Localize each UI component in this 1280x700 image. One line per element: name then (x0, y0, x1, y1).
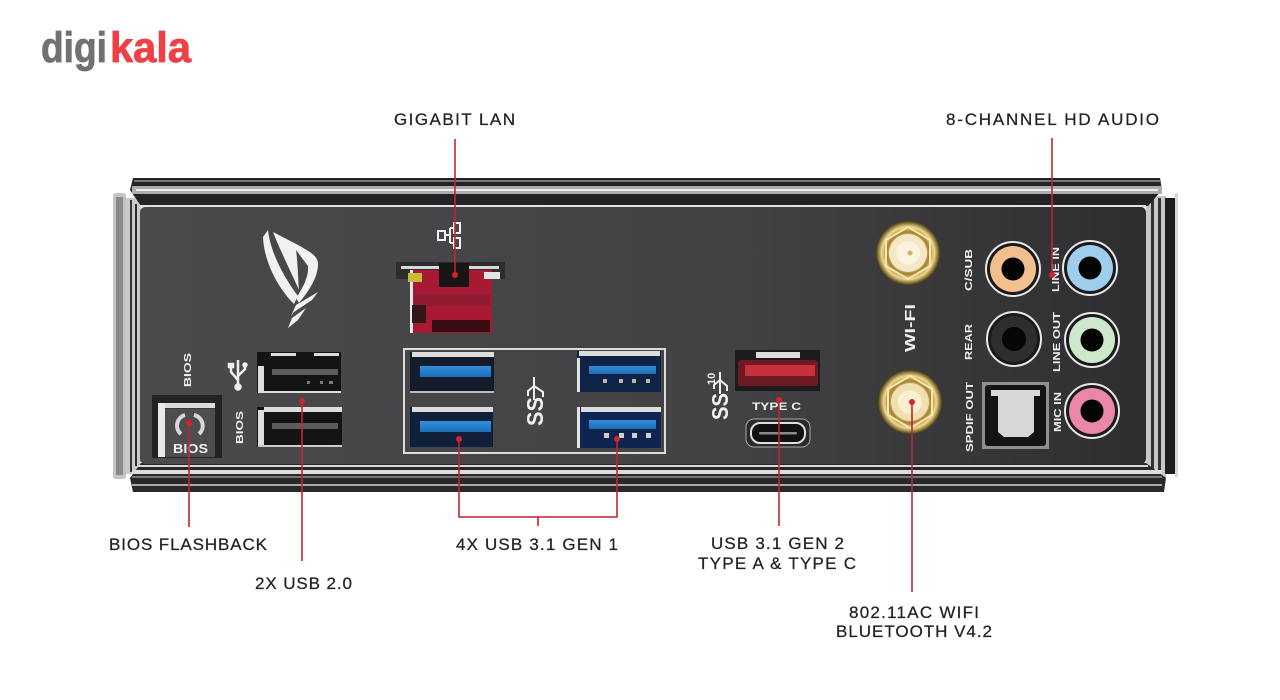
bottom rail (130, 463, 1166, 492)
Wi-Fi antenna connector top (876, 221, 940, 285)
icon: network (438, 223, 460, 248)
SS10 USB logo: 10 (706, 373, 718, 385)
silk labels: audio: MIC IN (1053, 392, 1064, 432)
silk label: TYPE C: TYPE C (752, 401, 801, 413)
white outline (404, 349, 665, 453)
jack: blue LINE IN (1063, 241, 1117, 295)
dark face plate (140, 207, 1146, 464)
silk label: BIOS beside button: BIOS (235, 411, 246, 444)
bottom-right blue port (577, 407, 661, 448)
logo: digikala: kala (110, 24, 192, 72)
top-right blue port (577, 351, 661, 392)
SPDIF optical port (982, 382, 1049, 449)
top-left blue port (410, 352, 494, 393)
label: USB 3.1 Gen 2 Type A and Type C (698, 534, 856, 573)
USB 2.0 ports (257, 352, 342, 447)
label: 802.11ac WiFi Bluetooth V4.2: BLUETOOTH V4.2 (836, 622, 992, 641)
BIOS flashback button (152, 395, 222, 458)
silk labels: audio: C/SUB (964, 249, 975, 291)
USB 3.1 Gen 2 Type-A port (735, 350, 820, 391)
SS10 USB logo (706, 372, 733, 420)
jack: black REAR (987, 312, 1041, 366)
ROG logo (263, 230, 318, 328)
silk label: WI-FI: WI-FI (902, 304, 919, 352)
label: BIOS flashback: BIOS FLASHBACK (109, 535, 268, 554)
silk labels: audio: LINE IN (1051, 247, 1062, 292)
silk labels: audio: SPDIF OUT (965, 382, 976, 452)
silk labels: audio: LINE OUT (1052, 312, 1063, 372)
left flange (113, 193, 141, 479)
right flange (1146, 193, 1178, 478)
BIOS flashback button: BIOS (173, 441, 208, 456)
leader line: 8-channel HD audio (1049, 138, 1055, 278)
label: 4X USB 3.1 Gen 1: 4X USB 3.1 GEN 1 (456, 535, 618, 554)
logo: digikala: digi (41, 24, 107, 72)
jack: orange C/SUB (986, 242, 1040, 296)
label: 8-channel HD audio: 8-CHANNEL HD AUDIO (946, 110, 1159, 129)
silk labels: audio (964, 247, 1064, 452)
icon: USB trident (229, 360, 246, 390)
leader line: BIOS flashback (186, 420, 192, 527)
Gigabit LAN port (396, 262, 505, 333)
leader line: Gigabit LAN (452, 139, 458, 278)
label: 802.11ac WiFi Bluetooth V4.2: 802.11AC WIFI (849, 603, 979, 622)
icon: refresh arrows (177, 415, 203, 434)
I/O shield metal frame (113, 178, 1178, 492)
audio jacks (986, 241, 1119, 438)
bracket: 4X USB 3.1 Gen 1 (456, 436, 620, 526)
silk label: BIOS above button: BIOS (183, 353, 194, 387)
SS USB logo (522, 377, 548, 426)
SS USB logo: SS (522, 397, 548, 426)
USB Type-C port (746, 419, 810, 447)
label: USB 3.1 Gen 2 Type A and Type C: USB 3.1 GEN 2 (711, 534, 844, 553)
upper USB 2.0 port (257, 352, 341, 393)
leader line: USB 3.1 Gen 2 (776, 397, 782, 526)
label: 802.11ac WiFi Bluetooth V4.2 (836, 603, 992, 641)
label: 2X USB 2.0: 2X USB 2.0 (255, 574, 352, 593)
top rail (130, 178, 1162, 207)
jack: pink MIC IN (1065, 384, 1119, 438)
label: Gigabit LAN: GIGABIT LAN (394, 110, 515, 129)
lower USB 2.0 port (257, 407, 342, 447)
leader line: WiFi Bluetooth (909, 399, 915, 592)
logo: digikala (41, 24, 192, 72)
SS10 USB logo: SS (707, 393, 733, 420)
silk labels: audio: REAR (964, 323, 975, 360)
label: USB 3.1 Gen 2 Type A and Type C: TYPE A & TYPE C (698, 554, 856, 573)
bottom-left blue port (410, 407, 493, 447)
leader line: 2X USB 2.0 (299, 398, 305, 561)
SuperSpeed USB 3.1 Gen 1 block (404, 349, 665, 453)
jack: green LINE OUT (1065, 313, 1119, 367)
Wi-Fi antenna connector bottom (878, 370, 942, 434)
